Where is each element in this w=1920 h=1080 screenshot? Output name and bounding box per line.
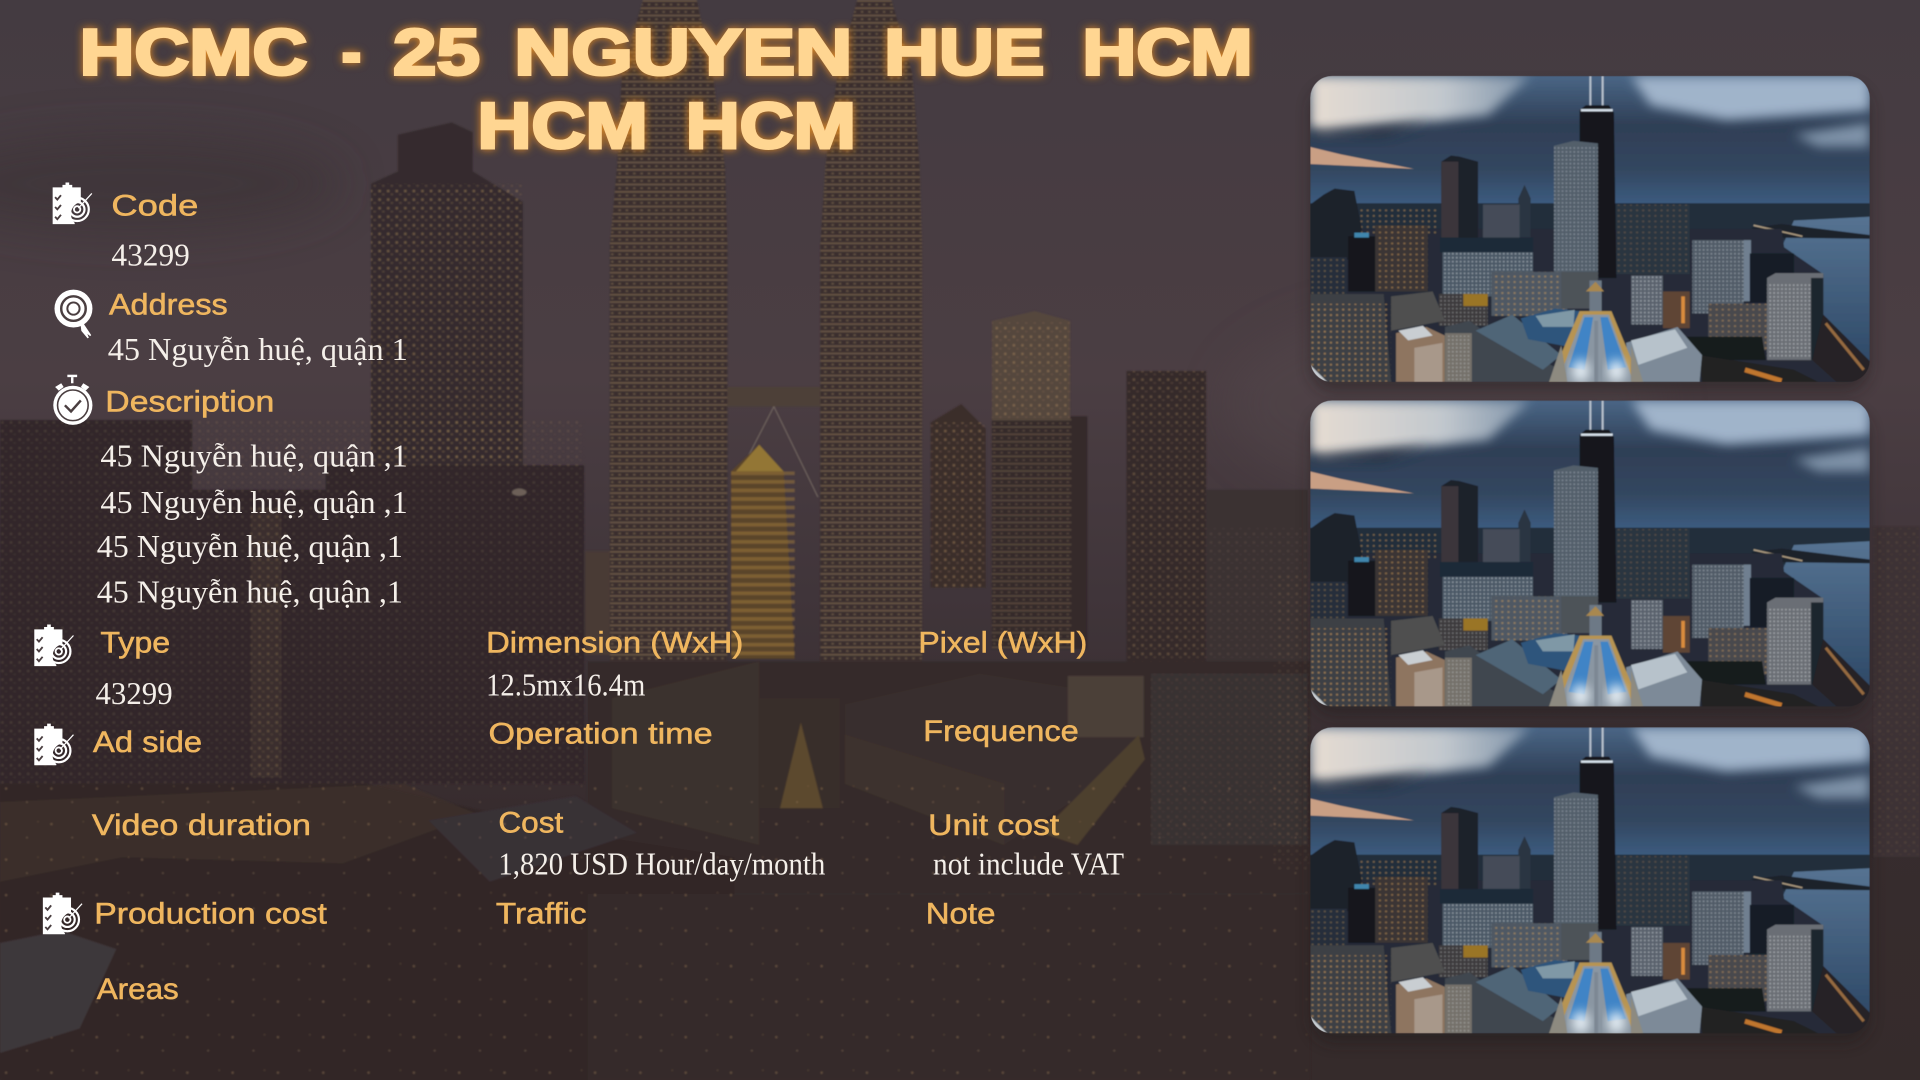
label: Code: Code [111,190,198,223]
label: Video duration: Video duration [92,809,311,842]
icon: clipboard target (Ad side) [34,724,73,765]
title: - [342,16,361,89]
label: Operation time: Operation time [489,717,713,750]
value: description lines: 45 Nguyễn huệ, quận ,1 [100,485,408,520]
title: NGUYEN [514,16,852,89]
value: code: 43299 [111,238,190,273]
value: dimension: 12.5mx16.4m [486,668,646,703]
title: 25 [393,16,480,89]
value: type: 43299 [96,676,173,711]
label: Type: Type [100,627,170,660]
icon: clipboard target (Type) [34,624,73,666]
value: unit cost: not include VAT [933,846,1124,881]
photo 2 [1310,400,1870,716]
label: Traffic: Traffic [496,897,587,930]
label: Frequence: Frequence [923,715,1079,748]
value: description lines: 45 Nguyễn huệ, quận ,1 [100,439,408,474]
label: Ad side: Ad side [93,726,202,759]
title: HUE [884,16,1044,89]
title: HCM [686,89,856,162]
title [80,16,1253,162]
value: description lines: 45 Nguyễn huệ, quận ,1 [97,529,403,564]
label: Address: Address [109,289,228,322]
value: description lines: 45 Nguyễn huệ, quận ,1 [97,574,403,609]
label: Production cost: Production cost [94,897,327,930]
value: description lines [97,439,408,609]
label: Note: Note [926,897,996,930]
icon: target with arrow (Address) [54,290,92,338]
label: Cost: Cost [498,807,563,840]
value: address: 45 Nguyễn huệ, quận 1 [108,332,408,367]
label: Unit cost: Unit cost [928,809,1059,842]
label: Dimension: Dimension (WxH) [486,627,743,660]
icon: clipboard target (Production cost) [43,893,82,934]
icon: clipboard target (Code) [53,182,92,224]
title: HCM [1082,16,1253,89]
title: HCM [478,89,648,162]
photo 1 [1310,76,1870,392]
photo 3 [1310,727,1870,1043]
label: Pixel: Pixel (WxH) [918,627,1087,660]
label: Areas: Areas [97,973,179,1006]
label: Description: Description [105,385,274,418]
icon: stopwatch (Description) [53,375,92,425]
value: cost: 1,820 USD Hour/day/month [498,846,825,881]
title: HCMC [80,16,307,89]
